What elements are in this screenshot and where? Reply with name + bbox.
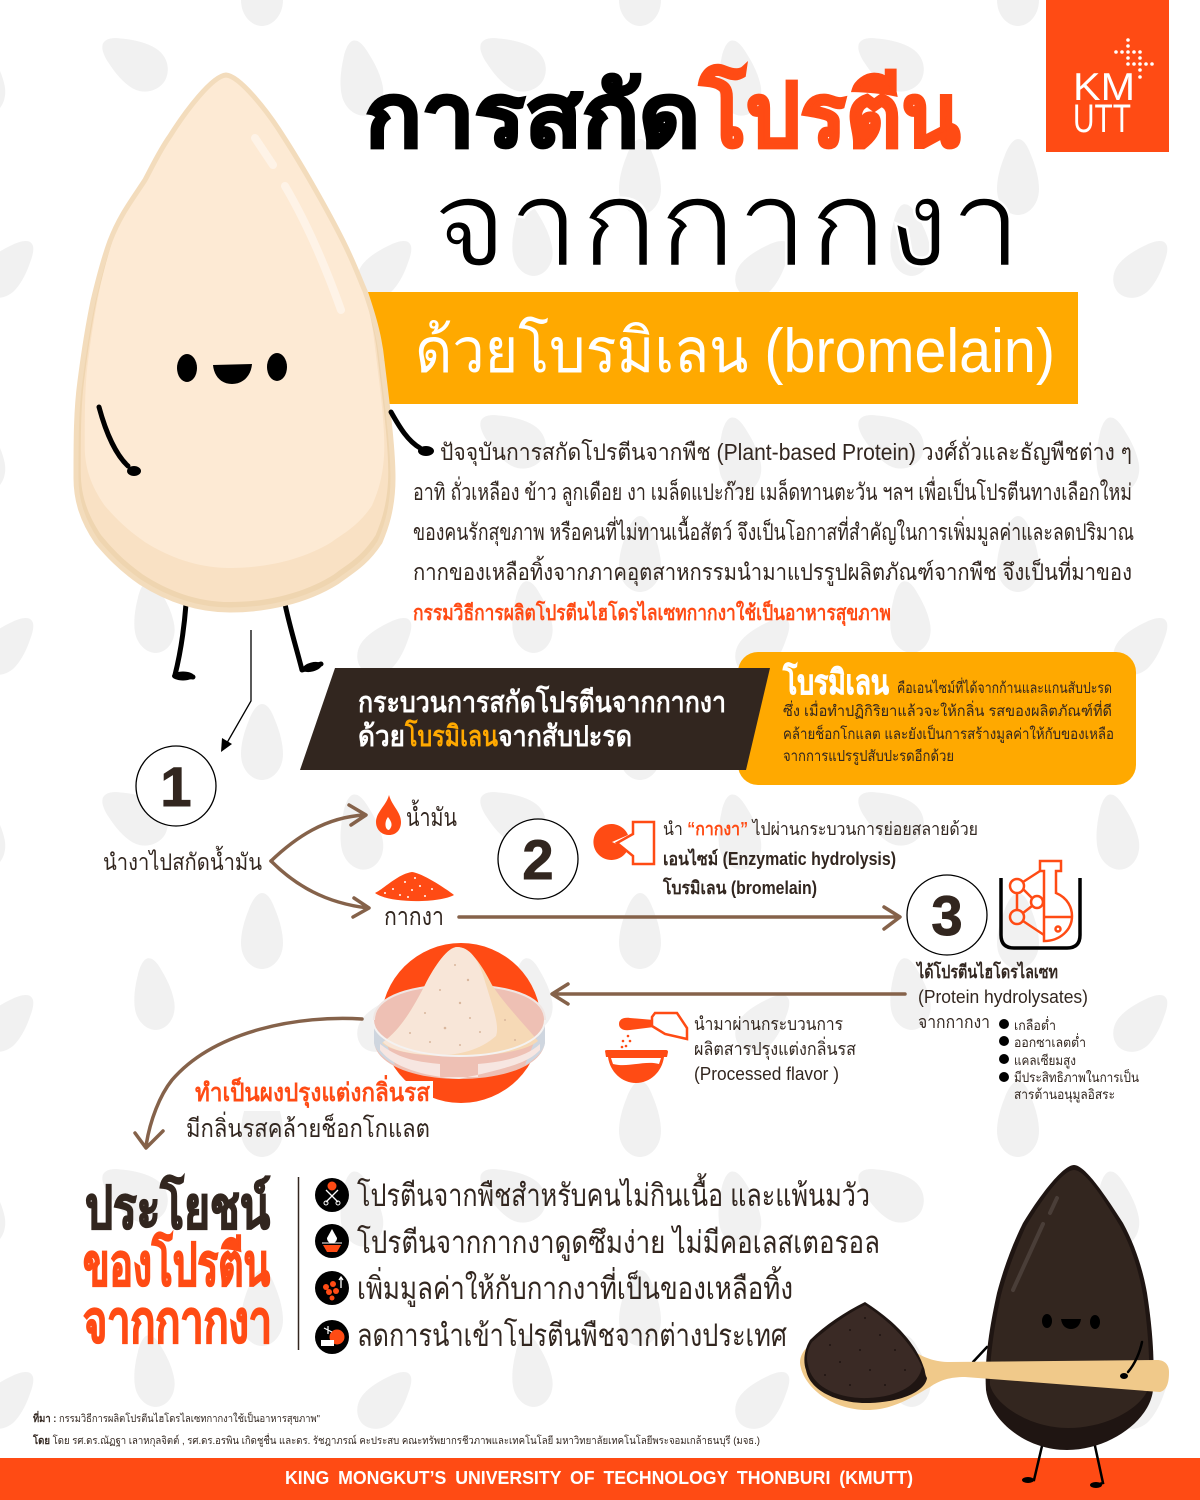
benefits list: เพิ่มมูลค่าให้กับกากงาที่เป็นของเหลือทิ้ง: [357, 1266, 793, 1307]
icon: sesame meal pile: [375, 872, 454, 901]
callout: bromelain definition: คล้ายช็อกโกแลต และยังเป็นการสร้างมูลค่าให้กับของเหลือ: [783, 724, 1114, 743]
step 4 description: [694, 1014, 856, 1084]
step 2: 2: [522, 828, 554, 891]
list: properties: สารต้านอนุมูลอิสระ: [1014, 1087, 1115, 1103]
footer band: [0, 1458, 1200, 1500]
banner: process heading: โบรมิเลน: [404, 718, 498, 753]
logo: KMUTT: UTT: [1073, 97, 1131, 141]
subtitle band: ด้วยโบรมิเลน: [365, 292, 1078, 404]
intro paragraph: [413, 436, 1134, 627]
list: properties: [999, 1016, 1139, 1103]
banner: process heading: จากสับปะรด: [498, 721, 632, 753]
source credits: ที่มา : กรรมวิธีการผลิตโปรตีนไฮโดรไลเซทกากงาใช้เป็นอาหารสุขภาพ": [33, 1410, 320, 1425]
benefits list: โปรตีนจากกากงาดูดซึมง่าย ไม่มีคอเลสเตอรอล: [357, 1225, 880, 1261]
title: การสกัดโปรตีน: การสกัด: [365, 66, 700, 165]
list: properties: มีประสิทธิภาพในการเป็น: [1014, 1068, 1139, 1085]
step 3 result text: ได้โปรตีนไฮโดรไลเซท: [915, 961, 1058, 982]
arrow: to flavor powder: [552, 984, 905, 1004]
icon: beaker with flask: [1001, 861, 1080, 948]
benefits heading: ประโยชน์: [85, 1173, 270, 1241]
label: sesame meal: กากงา: [384, 903, 444, 931]
logo: KMUTT: KM: [1073, 66, 1135, 109]
benefits heading: ของโปรตีน: [83, 1230, 270, 1298]
title: การสกัดโปรตีน: โปรตีน: [699, 65, 960, 165]
title: การสกัดโปรตีน: [365, 65, 960, 165]
callout: bromelain definition: [738, 652, 1136, 785]
flavor powder caption: มีกลิ่นรสคล้ายช็อกโกแลต: [186, 1111, 430, 1143]
callout: bromelain definition: ซึ่ง เมื่อทำปฏิกิริยาแล้วจะให้กลิ่น รสของผลิตภัณฑ์ที่ดี: [783, 700, 1112, 720]
flavor powder caption: ทำเป็นผงปรุงแต่งกลิ่นรส: [195, 1075, 431, 1109]
step 3 result text: [915, 961, 1088, 1032]
step 2 description: [662, 818, 978, 898]
icon: enzyme: [593, 822, 654, 864]
list: properties: ออกซาเลตต่ำ: [1014, 1033, 1086, 1050]
title: จากกากงา: จากกากงา: [432, 156, 1022, 292]
step 1: นำงาไปสกัดน้ำมัน: [103, 846, 262, 875]
benefits heading: [83, 1173, 272, 1355]
banner: process heading: [300, 668, 770, 770]
step 3 result text: จากกากงา: [918, 1012, 990, 1032]
benefits heading: จากกากงา: [83, 1290, 272, 1355]
step 4 description: (Processed flavor ): [694, 1064, 839, 1084]
step 3: [907, 875, 987, 955]
intro paragraph: ปัจจุบันการสกัดโปรตีนจากพืช (Plant-based Protein) วงศ์ถั่วและธัญพืชต่าง ๆ: [440, 436, 1132, 466]
step 2 description: นำ “กากงา” ไปผ่านกระบวนการย่อยสลายด้วย: [663, 818, 978, 839]
callout: bromelain definition: คือเอนไซม์ที่ได้จากก้านและแกนสับปะรด: [897, 677, 1112, 697]
icon: import: [315, 1320, 349, 1354]
callout: bromelain definition: โบรมิเลน: [782, 662, 889, 702]
list: properties: เกลือต่ำ: [1014, 1016, 1056, 1033]
step 4 description: ผลิตสารปรุงแต่งกลิ่นรส: [694, 1036, 856, 1060]
step 4 description: นำมาผ่านกระบวนการ: [694, 1014, 843, 1034]
icon: oil drop: [376, 795, 401, 835]
step 2: [498, 819, 578, 899]
source credits: [32, 1410, 760, 1447]
source credits: โดย โดย รศ.ดร.ณัฏฐา เลาหกุลจิตต์ , รศ.ดร.อรพิน เกิดชูชื่น และดร. รัชฎาภรณ์ คะประสบ คณะทรัพยากรชีวภาพและเทคโนโลยี มหาวิทยาลัยเทคโนโลยีพระจอมเกล้าธนบุรี (มจธ.): [32, 1433, 760, 1447]
logo: KMUTT: [1046, 0, 1169, 152]
footer band: KING MONGKUT’S UNIVERSITY OF TECHNOLOGY THONBURI (KMUTT): [285, 1468, 913, 1488]
icon: absorption: [315, 1224, 349, 1258]
flavor powder caption: [186, 1075, 433, 1143]
callout: bromelain definition: จากการแปรรูปสับปะรดอีกด้วย: [783, 748, 954, 765]
benefits list: โปรตีนจากพืชสำหรับคนไม่กินเนื้อ และแพ้นมวัว: [357, 1173, 870, 1213]
character: cream sesame seed: [76, 75, 434, 680]
step 2 description: เอนไซม์ (Enzymatic hydrolysis): [663, 848, 896, 869]
arrow: to step 3: [459, 907, 900, 929]
illustration: petri dish with powder: [373, 943, 545, 1103]
arrow: flavor powder to benefits: [135, 1018, 362, 1148]
benefits list: [357, 1173, 880, 1353]
step 3 result text: (Protein hydrolysates): [918, 987, 1088, 1007]
icon: value: [315, 1271, 349, 1305]
label: oil: น้ำมัน: [406, 799, 457, 832]
intro paragraph: กรรมวิธีการผลิตโปรตีนไฮโดรไลเซทกากงาใช้เป็นอาหารสุขภาพ: [413, 599, 891, 627]
step 1: 1: [160, 755, 192, 818]
banner: process heading: กระบวนการสกัดโปรตีนจากกากงา: [358, 684, 726, 719]
step 1: [103, 746, 262, 875]
step 3: 3: [931, 884, 963, 947]
icon: seasoning bowl: [605, 1013, 687, 1083]
benefits list: ลดการนำเข้าโปรตีนพืชจากต่างประเทศ: [357, 1318, 787, 1353]
subtitle band: ด้วยโบรมิเลน: ด้วยโบรมิเลน (bromelain): [415, 316, 1055, 386]
character: black sesame seed with spoon: [800, 1165, 1169, 1488]
banner: process heading: ด้วย: [358, 721, 405, 753]
arrow: seed to step 1: [221, 630, 251, 752]
list: properties: แคลเซียมสูง: [1014, 1053, 1076, 1069]
step 2 description: โบรมิเลน (bromelain): [662, 877, 817, 898]
icon: no milk no meat: [315, 1178, 349, 1212]
arrows: oil and sesame meal split: [271, 805, 369, 917]
